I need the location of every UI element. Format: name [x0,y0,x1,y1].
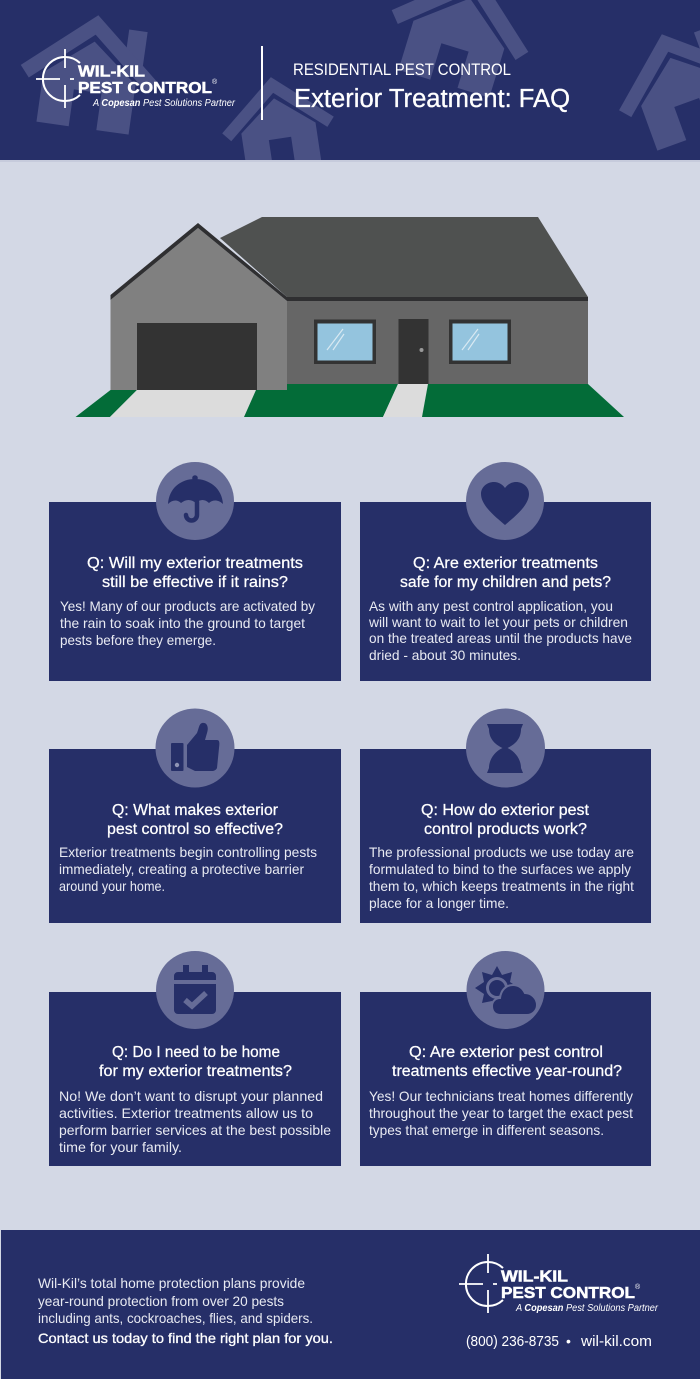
answer: As with any pest control application, you [369,598,613,614]
contact details: • [566,1333,571,1349]
question: Q: Will my exterior treatments [87,555,303,572]
question: still be effective if it rains? [102,574,288,591]
answer: place for a longer time. [369,895,509,911]
footer text block: Contact us today to find the right plan for you. [38,1330,333,1346]
icon: calendar [156,951,234,1029]
answer: the rain to soak into the ground to target [60,615,305,631]
right window [449,320,511,364]
answer: throughout the year to target the exact pest [369,1105,633,1121]
question: Q: Are exterior treatments [413,555,598,572]
answer [369,1088,633,1138]
answer: time for your family. [59,1139,182,1155]
answer: No! We don’t want to disrupt your planned [59,1088,323,1104]
lawn and driveway [76,384,624,417]
question [400,555,611,591]
answer [60,598,315,648]
contact details: wil-kil.com [580,1334,652,1350]
question [99,1044,292,1080]
garage door [137,323,257,390]
logo: Wil-Kil header: WIL-KIL [78,64,145,80]
logo: Wil-Kil footer: PEST CONTROL [501,1285,635,1302]
footer text block: year-round protection from over 20 pests [38,1293,284,1309]
question: Q: Are exterior pest control [409,1044,603,1061]
answer: around your home. [59,878,165,894]
answer: them to, which keeps treatments in the right [369,878,634,894]
answer: Exterior treatments begin controlling pests [59,844,317,860]
answer: Yes! Our technicians treat homes differently [369,1088,633,1104]
question: Q: Do I need to be home [112,1044,280,1061]
panel: footer [1,1230,700,1379]
ghost house icons [18,0,700,176]
icon: hourglass [466,708,545,788]
panel: how it works FAQ [360,708,651,923]
answer: activities. Exterior treatments allow us to [59,1105,313,1121]
logo: Wil-Kil footer: A Copesan Pest Solutions Partner [515,1303,659,1314]
answer: dried - about 30 minutes. [369,647,521,663]
header divider [261,46,263,120]
logo: Wil-Kil header: PEST CONTROL [78,80,212,97]
answer [368,598,632,663]
logo: Wil-Kil footer: WIL-KIL [501,1268,568,1286]
logo: Wil-Kil header: A Copesan Pest Solutions Partner [92,98,236,109]
answer: pests before they emerge. [60,632,216,648]
answer: immediately, creating a protective barrier [59,861,304,877]
panel: year-round FAQ [360,951,651,1166]
icon: thumbs up [156,708,234,788]
icon: umbrella [156,462,234,540]
footer text block: including ants, cockroaches, flies, and spiders. [38,1310,313,1326]
logo: Wil-Kil header: ® [212,78,218,86]
house illustration [76,217,624,417]
answer: on the treated areas until the products have [369,630,632,646]
question: pest control so effective? [107,821,283,838]
answer: will want to wait to let your pets or children [368,614,628,630]
question [421,802,590,838]
answer [59,844,317,894]
answer: The professional products we use today are [369,844,634,860]
contact details: (800) 236-8735 [466,1334,559,1350]
answer: types that emerge in different seasons. [369,1122,604,1138]
question [392,1044,622,1080]
answer: perform barrier services at the best possible [59,1122,331,1138]
question: treatments effective year-round? [392,1063,622,1080]
footer text block [38,1275,333,1346]
question [87,555,303,591]
icon: sun and cloud [466,951,544,1029]
panel: safety FAQ [360,462,651,681]
answer: formulated to bind to the surfaces we apply [369,861,631,877]
heading: residential pest control: RESIDENTIAL PEST CONTROL [293,61,511,79]
question: control products work? [424,821,587,838]
question: for my exterior treatments? [99,1063,292,1080]
logo: Wil-Kil footer: ® [635,1283,641,1291]
icon: heart [466,462,544,540]
contact details [466,1333,652,1350]
panel: header banner [0,0,700,176]
panel: effectiveness FAQ [49,708,341,923]
answer [59,1088,331,1155]
title: Exterior Treatment: FAQ [294,85,570,113]
answer: Yes! Many of our products are activated by [60,598,315,614]
left window [314,320,376,364]
footer text block: Wil-Kil’s total home protection plans provide [38,1275,305,1291]
panel: rain FAQ [49,462,341,681]
panel: being home FAQ [49,951,341,1166]
front door [398,319,428,384]
question [107,802,283,838]
logo: Wil-Kil footer [459,1254,659,1314]
question: Q: What makes exterior [112,802,278,819]
question: safe for my children and pets? [400,574,611,591]
answer [369,844,634,911]
logo: Wil-Kil header [36,49,236,109]
question: Q: How do exterior pest [421,802,590,819]
